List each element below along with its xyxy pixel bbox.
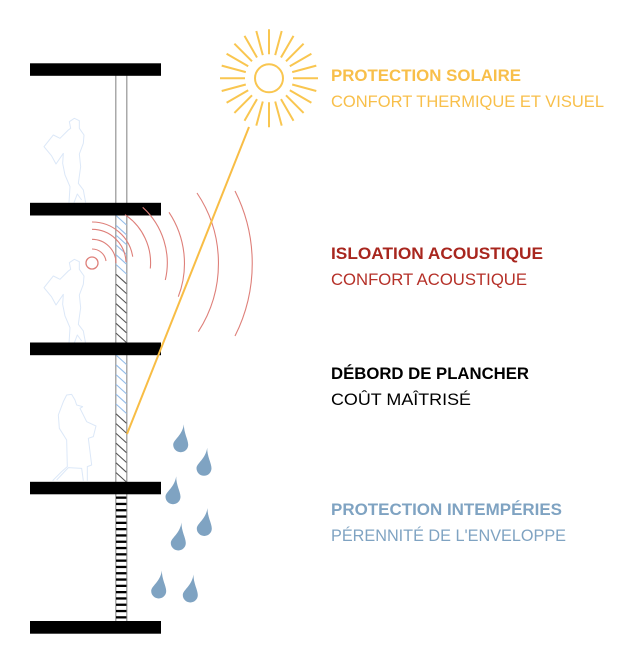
text: floor overhang	[331, 364, 529, 409]
blue hatch lower	[116, 355, 126, 414]
figure: standing person middle floor	[44, 259, 86, 344]
text: acoustic insulation	[331, 244, 543, 289]
text: floor overhang: DÉBORD DE PLANCHER	[331, 364, 529, 383]
black hatch upper	[116, 274, 126, 343]
text: weather protection	[331, 500, 566, 545]
text: solar protection: PROTECTION SOLAIRE	[331, 66, 521, 85]
text: acoustic insulation: ISLOATION ACOUSTIQUE	[331, 244, 543, 263]
text: weather protection: PROTECTION INTEMPÉRIES	[331, 500, 562, 519]
figure: standing person top floor	[44, 118, 86, 203]
floor slabs	[30, 63, 161, 634]
sun ray line	[127, 127, 249, 434]
text: floor overhang: COÛT MAÎTRISÉ	[331, 390, 471, 409]
figure: standing person lower floor	[53, 394, 96, 481]
rain drops	[151, 424, 212, 602]
text: solar protection	[331, 66, 604, 111]
wall: facade double skin	[115, 70, 128, 625]
icon: sun	[220, 29, 318, 127]
text: solar protection: CONFORT THERMIQUE ET VISUEL	[331, 92, 604, 111]
sound waves	[86, 191, 252, 336]
black hatch lower	[116, 414, 126, 482]
text: weather protection: PÉRENNITÉ DE L'ENVELOPPE	[331, 526, 566, 545]
wall: opaque ladder base	[116, 496, 126, 618]
text: acoustic insulation: CONFORT ACOUSTIQUE	[331, 270, 527, 289]
blue hatch upper	[116, 216, 126, 274]
